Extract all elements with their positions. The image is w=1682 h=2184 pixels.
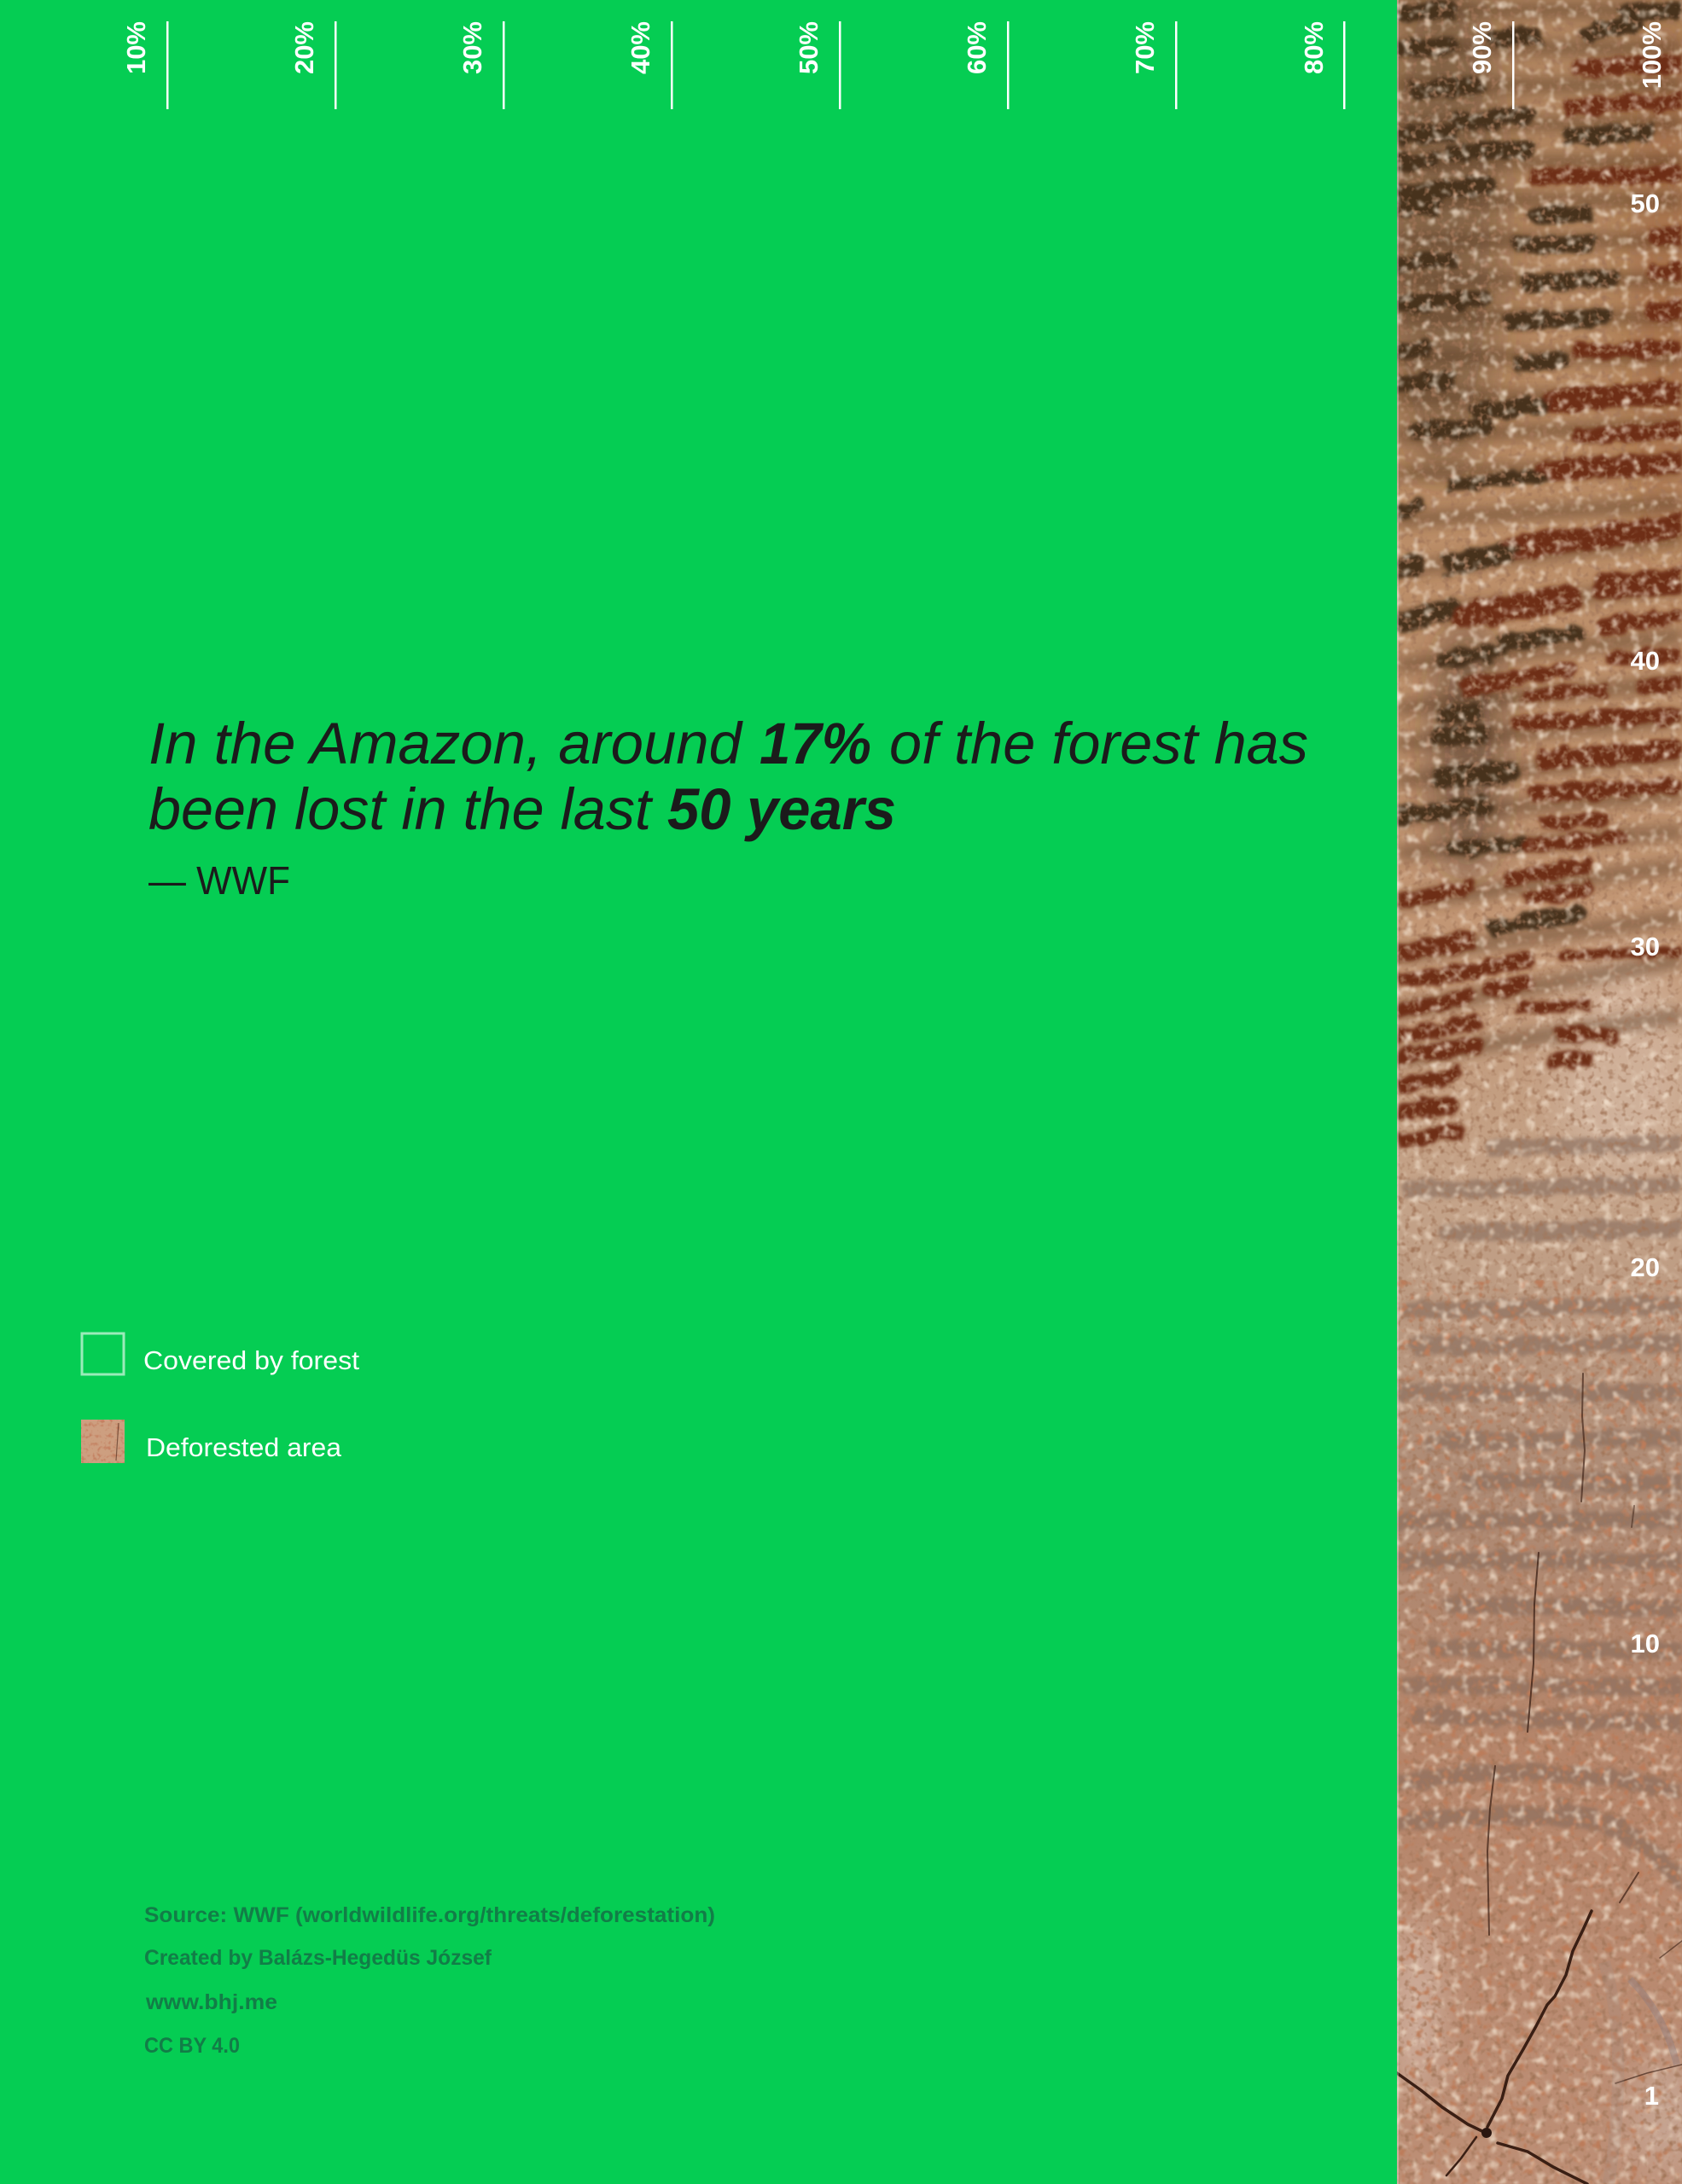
quote line 1: 17% bbox=[760, 711, 871, 776]
quote line 2: 50 years bbox=[667, 776, 896, 842]
axis: years labels bbox=[1631, 189, 1660, 2111]
panel: wood cross-section (deforested area) bbox=[1382, 0, 1682, 2184]
tick: 70% bbox=[1175, 21, 1178, 109]
axis: percentage ticks bbox=[166, 21, 1514, 109]
label: 60%: 60% bbox=[962, 21, 992, 74]
tick: 20% bbox=[335, 21, 336, 109]
legend swatch: covered by forest bbox=[82, 1333, 124, 1374]
label: 100%: 100% bbox=[1637, 21, 1667, 89]
tick: 80% bbox=[1343, 21, 1345, 109]
label: 90%: 90% bbox=[1467, 21, 1497, 74]
quote line 1: of the forest has bbox=[889, 711, 1308, 776]
tick: 90% bbox=[1512, 21, 1514, 109]
quote line 1: In the Amazon, around bbox=[148, 711, 744, 776]
year: 50: 50 bbox=[1631, 189, 1660, 218]
website: www.bhj.me bbox=[145, 1990, 277, 2014]
label: 80%: 80% bbox=[1299, 21, 1329, 74]
year: 30: 30 bbox=[1631, 932, 1660, 961]
label: 40%: 40% bbox=[626, 21, 655, 74]
license: CC BY 4.0 bbox=[144, 2034, 240, 2058]
year: 40: 40 bbox=[1631, 646, 1660, 676]
label: 20%: 20% bbox=[289, 21, 319, 74]
year: 1: 1 bbox=[1644, 2081, 1659, 2111]
tick: 10% bbox=[166, 21, 169, 109]
year: 20: 20 bbox=[1631, 1252, 1660, 1282]
quote bbox=[148, 711, 1308, 903]
tick: 30% bbox=[503, 21, 505, 109]
tick: 40% bbox=[671, 21, 672, 109]
credits bbox=[144, 1903, 715, 2058]
year: 10: 10 bbox=[1631, 1629, 1660, 1658]
tick: 60% bbox=[1007, 21, 1009, 109]
legend swatch: deforested area bbox=[81, 1420, 125, 1463]
source: Source: WWF (worldwildlife.org/threats/deforestation) bbox=[144, 1903, 715, 1927]
legend label: covered by forest: Covered by forest bbox=[143, 1345, 359, 1375]
label: 30%: 30% bbox=[457, 21, 487, 74]
tick: 50% bbox=[839, 21, 841, 109]
axis: percentage labels bbox=[121, 21, 1667, 89]
wood grain specks bbox=[1397, 0, 1682, 2184]
label: 50%: 50% bbox=[794, 21, 824, 74]
legend label: deforested area: Deforested area bbox=[146, 1432, 342, 1462]
legend bbox=[81, 1333, 359, 1463]
label: 10%: 10% bbox=[121, 21, 151, 74]
author: Created by Balázs-Hegedüs József bbox=[144, 1946, 492, 1970]
quote line 2: been lost in the last bbox=[148, 776, 654, 842]
quote attribution: — WWF bbox=[148, 858, 290, 903]
label: 70%: 70% bbox=[1130, 21, 1160, 74]
icon: cracks in the wood bbox=[1397, 1374, 1682, 2184]
